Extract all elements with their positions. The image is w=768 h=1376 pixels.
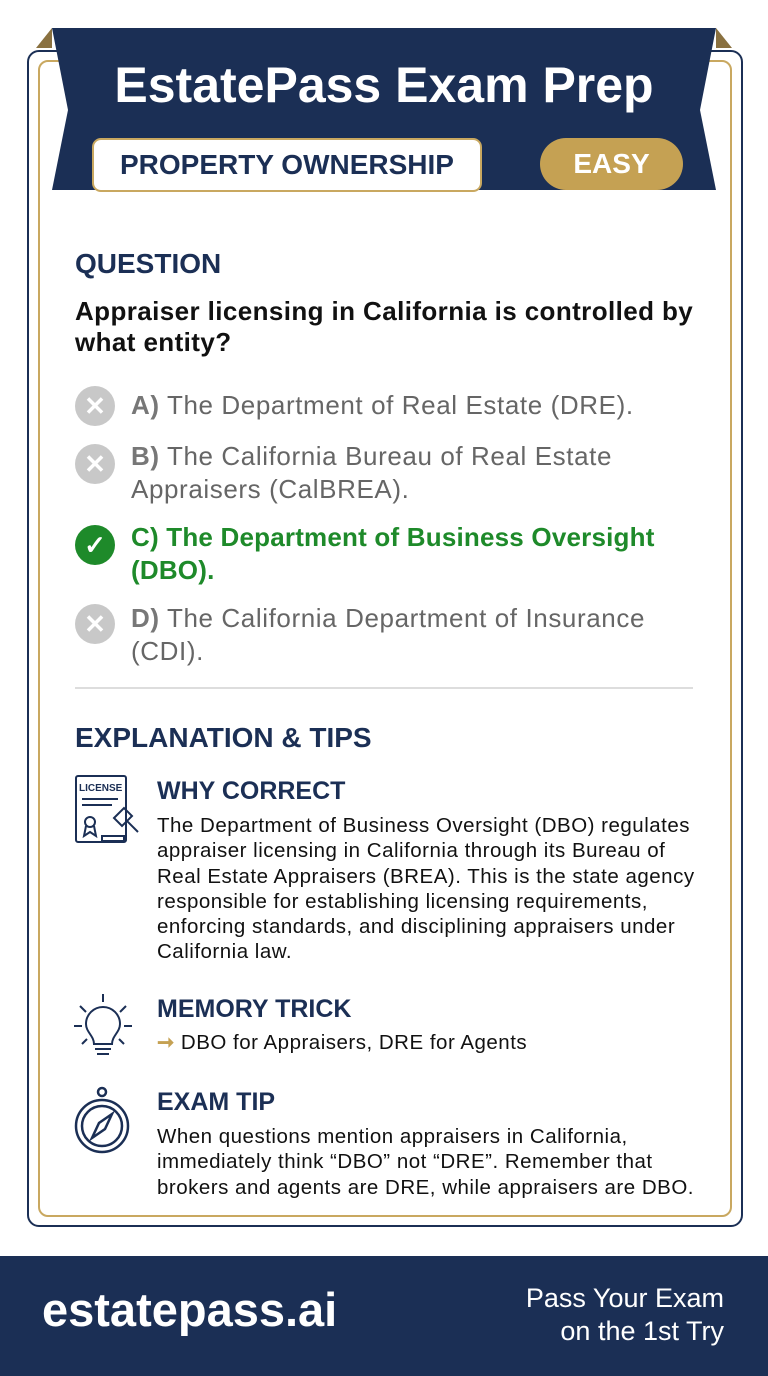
icon: lightbulb: [74, 994, 132, 1055]
memory trick: MEMORY TRICK: [157, 995, 351, 1023]
text: ✕: [84, 449, 106, 479]
text: brokers and agents are DRE, while appraisers are DBO.: [157, 1176, 694, 1199]
card inner gold border: [38, 60, 732, 1217]
explanation heading: EXPLANATION & TIPS: [75, 722, 372, 753]
card outer: [27, 50, 743, 1227]
difficulty pill: EASY: [573, 148, 650, 179]
text: appraiser licensing in California through its Bureau of: [157, 839, 665, 862]
title: EstatePass Exam Prep: [114, 57, 654, 113]
text: B) The California Bureau of Real Estate: [131, 441, 612, 471]
text: ✕: [84, 391, 106, 421]
text: C) The Department of Business Oversight: [131, 522, 655, 552]
option A: [75, 386, 634, 426]
option D: [75, 603, 645, 666]
footer: [0, 1256, 768, 1376]
text: enforcing standards, and disciplining appraisers under: [157, 915, 675, 938]
icon: license: [75, 775, 139, 843]
question text: what entity?: [75, 327, 231, 357]
text: (DBO).: [131, 555, 215, 585]
text: Real Estate Appraisers (BREA). This is the state agency: [157, 865, 695, 888]
category pill: [92, 138, 482, 192]
footer tagline: Pass Your Exam: [526, 1283, 724, 1313]
footer tagline: [526, 1283, 724, 1346]
text: When questions mention appraisers in California,: [157, 1125, 628, 1148]
text: ✕: [84, 609, 106, 639]
icon: license: LICENSE: [79, 783, 123, 794]
text: The Department of Business Oversight (DBO) regulates: [157, 814, 690, 837]
icon: compass: [74, 1086, 130, 1154]
text: (CDI).: [131, 636, 204, 666]
text: Appraisers (CalBREA).: [131, 474, 409, 504]
question text: Appraiser licensing in California is controlled by: [75, 296, 693, 326]
option B: [75, 441, 612, 504]
question text: [74, 296, 693, 357]
text: ➞ DBO for Appraisers, DRE for Agents: [157, 1031, 527, 1054]
exam tip: EXAM TIP: [157, 1088, 275, 1116]
text: A) The Department of Real Estate (DRE).: [131, 390, 634, 420]
text: ✓: [84, 530, 106, 560]
question heading: QUESTION: [75, 248, 221, 279]
text: responsible for establishing licensing requirements,: [157, 890, 648, 913]
category pill: PROPERTY OWNERSHIP: [120, 149, 454, 180]
option C correct: [75, 522, 655, 585]
header ribbon: [36, 28, 732, 190]
why correct: WHY CORRECT: [157, 777, 345, 805]
footer tagline: on the 1st Try: [560, 1316, 724, 1346]
text: California law.: [157, 940, 292, 963]
text: D) The California Department of Insurance: [131, 603, 645, 633]
footer url: estatepass.ai: [42, 1283, 337, 1336]
difficulty pill: [540, 138, 683, 190]
text: immediately think “DBO” not “DRE”. Remember that: [157, 1150, 653, 1173]
